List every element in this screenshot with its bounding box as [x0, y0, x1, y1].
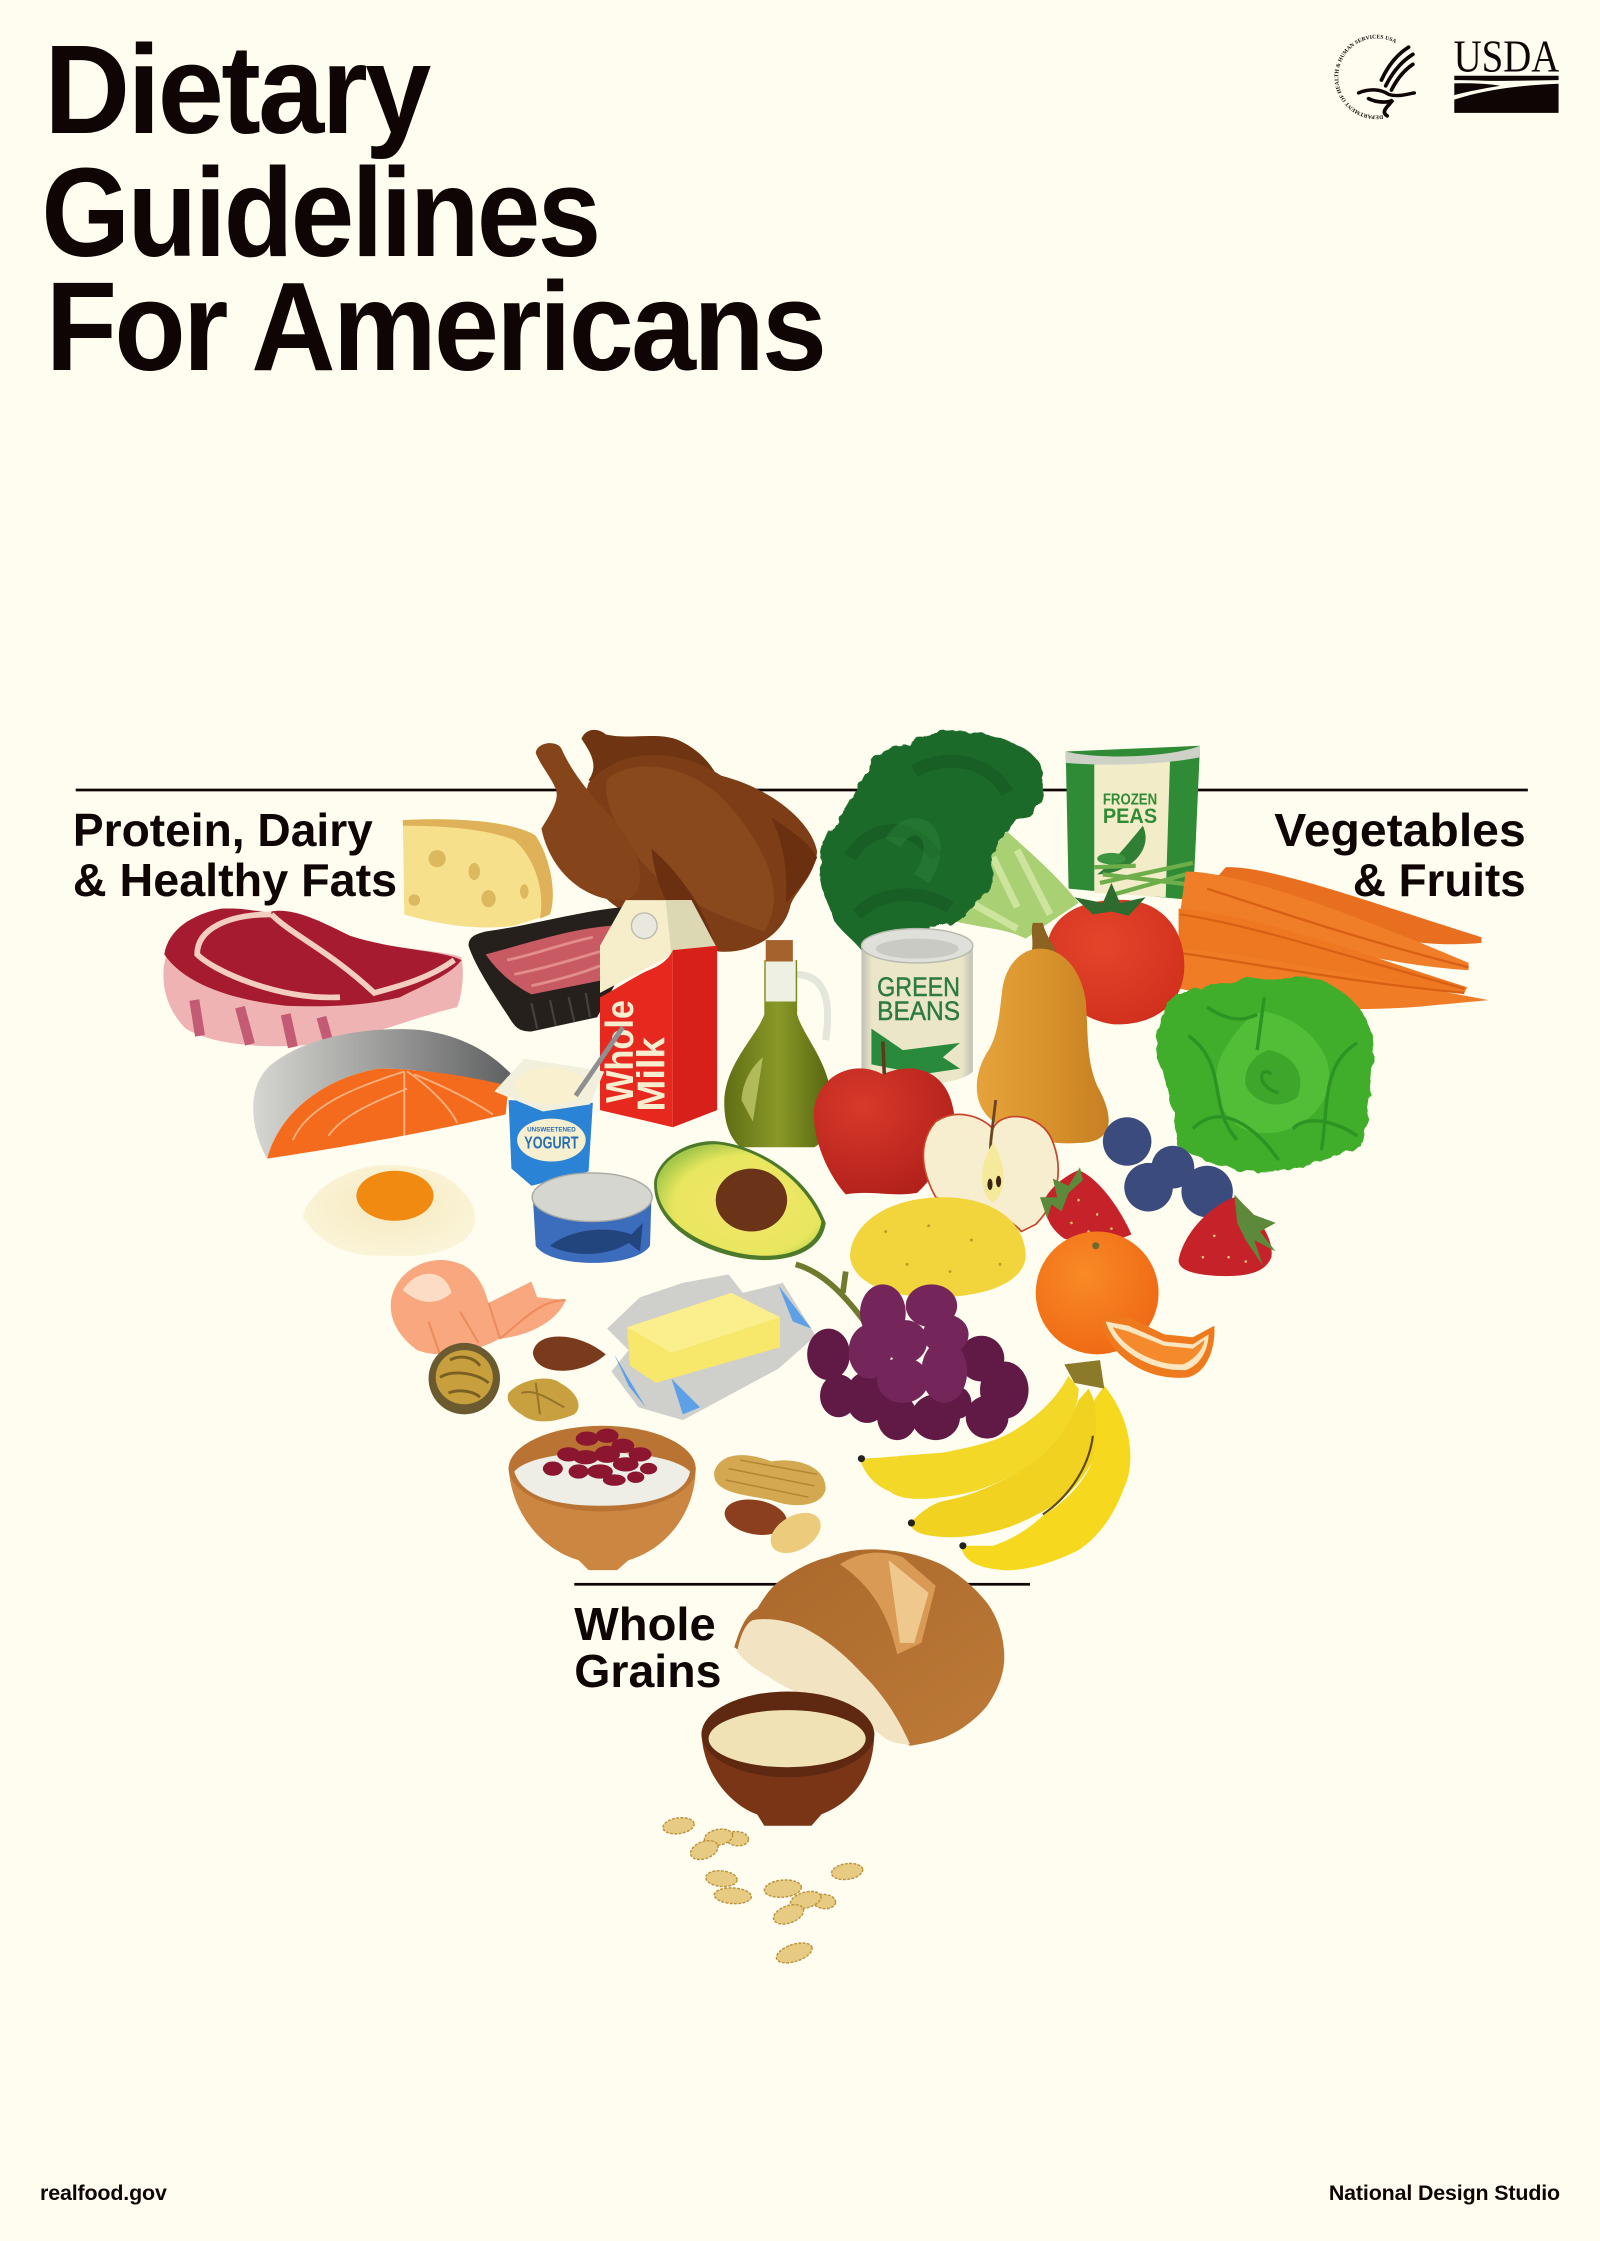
heading: protein, dairy and healthy fats: Protein, Dairy: [73, 804, 373, 856]
food: avocado half: [654, 1141, 826, 1260]
food: broccoli: [820, 731, 1079, 950]
divider line: protein and vegetables: [76, 789, 1528, 791]
heading: vegetables and fruits: & Fruits: [1353, 854, 1526, 906]
food: walnut half: [508, 1379, 579, 1421]
title: Guidelines: [41, 142, 599, 283]
food: yellow potato: [850, 1197, 1026, 1297]
food: oatmeal bowl: [701, 1692, 874, 1826]
food: scattered oat flakes: [662, 1816, 864, 1967]
heading: vegetables and fruits: Vegetables: [1274, 804, 1526, 856]
food: green beans can: [861, 929, 973, 1084]
food: bread loaf: [734, 1549, 1004, 1746]
food: orange slice: [1100, 1316, 1214, 1378]
food: blueberries: [1103, 1117, 1233, 1217]
food: yogurt cup with spoon: YOGURT: [524, 1133, 579, 1153]
food: yogurt cup with spoon: [494, 1027, 623, 1186]
heading: protein, dairy and healthy fats: & Healthy Fats: [73, 854, 397, 906]
heading: whole grains: Grains: [574, 1645, 721, 1697]
food: canned tuna: [532, 1173, 652, 1263]
food: carrots: [1179, 867, 1489, 1009]
food: halved apple: [923, 1100, 1058, 1232]
food: orange: [1036, 1232, 1159, 1354]
food: yogurt cup with spoon: UNSWEETENED: [527, 1127, 576, 1134]
logo: USDA: USDA: [1454, 31, 1559, 82]
food: frozen peas bag: FROZEN: [1103, 791, 1157, 808]
food: ground beef tray: [469, 907, 621, 1032]
food: butternut squash: [977, 923, 1109, 1143]
food: walnut in shell: [429, 1343, 500, 1414]
food: olive oil bottle: [724, 940, 831, 1147]
food: milk carton: Milk: [630, 1037, 673, 1112]
food: tomato: [1047, 883, 1184, 1024]
logo: USDA: [1454, 31, 1559, 113]
heading: whole grains: [574, 1598, 721, 1697]
food: almond: [533, 1336, 606, 1371]
food: cheese wedge: [403, 819, 553, 927]
food: milk carton: Whole: [599, 1000, 642, 1103]
logo: HHS department seal: DEPARTMENT OF HEALTH & HUMAN SERVICES USA: [1334, 34, 1396, 120]
footer: credit: National Design Studio: [1329, 2181, 1560, 2205]
food: rice and beans bowl: [509, 1426, 696, 1570]
title: Dietary: [44, 19, 431, 160]
footer: website: realfood.gov: [40, 2181, 167, 2205]
food: frozen peas bag: [1066, 746, 1200, 900]
food: green beans can: GREEN: [877, 972, 960, 1002]
food: strawberry left: [1040, 1167, 1131, 1241]
food: strawberry right: [1179, 1194, 1276, 1276]
title: For Americans: [46, 256, 824, 397]
food: butter in foil: [607, 1274, 816, 1420]
food: t-bone steak: [163, 908, 463, 1047]
food: red apple: [814, 1042, 954, 1194]
food: green beans can: BEANS: [877, 996, 960, 1026]
food: frozen peas bag: PEAS: [1103, 804, 1157, 828]
divider line: whole grains: [574, 1583, 1030, 1586]
heading: whole grains: Whole: [574, 1598, 716, 1650]
food: peanuts: [714, 1455, 828, 1561]
food: fried egg: [303, 1165, 475, 1256]
food: roast chicken: [536, 730, 817, 952]
food: grapes: [796, 1264, 1029, 1440]
food: milk carton: [599, 900, 717, 1127]
food: shrimp: [391, 1260, 566, 1354]
food: salmon steak: [253, 1029, 511, 1159]
heading: vegetables and fruits: [1274, 804, 1526, 906]
title: [41, 19, 824, 397]
food: bananas: [858, 1360, 1130, 1570]
heading: protein, dairy and healthy fats: [73, 804, 397, 906]
food: lettuce: [1156, 977, 1374, 1172]
